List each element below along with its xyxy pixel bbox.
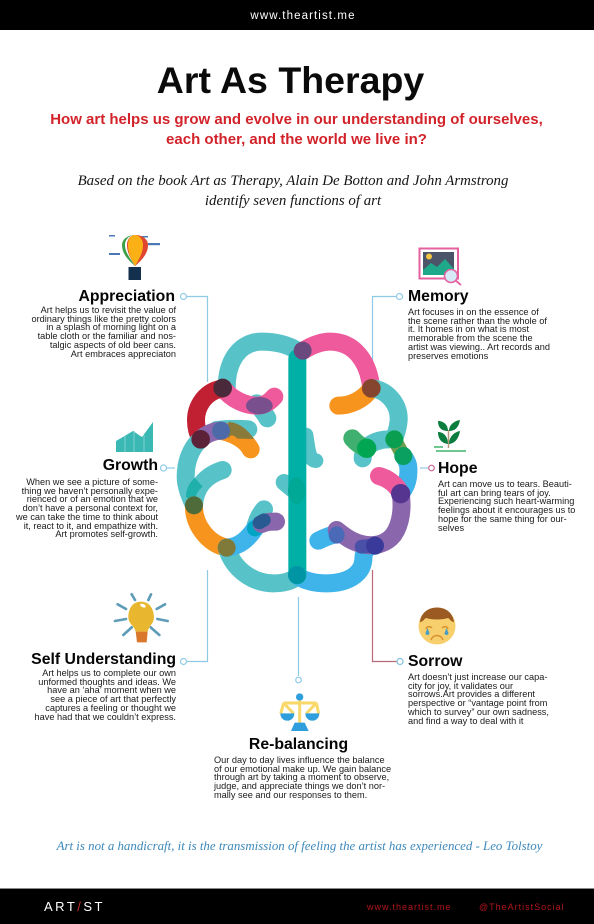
heading: Appreciation: Appreciation <box>78 288 175 305</box>
footer website: www.theartist.me <box>367 902 452 912</box>
intro text <box>78 173 508 208</box>
text: Self Understanding: captures a feeling or thought we <box>45 703 176 713</box>
text: Appreciation: Art helps us to revisit the value of <box>41 305 176 315</box>
text: Appreciation: table cloth or the familiar and nos- <box>38 331 176 341</box>
text: Hope: selves <box>438 523 464 533</box>
header bar: www.theartist.me <box>250 10 356 22</box>
text: Self Understanding <box>35 668 176 722</box>
text: Re-balancing: through art by taking a moment to observe, <box>214 772 389 782</box>
brain: central bar <box>288 342 312 584</box>
brain: right hemisphere <box>298 342 412 583</box>
icon: framed picture with magnifier <box>418 248 462 286</box>
icon: growth chart <box>116 422 153 452</box>
icon: hot air balloon <box>109 235 160 280</box>
text: Growth <box>16 477 158 539</box>
text: Memory <box>408 307 550 361</box>
text: Memory: preserves emotions <box>408 351 488 361</box>
text: Re-balancing: mally see and our responses to them. <box>214 790 367 800</box>
text: Memory: artist was viewing.. Art records and <box>408 342 550 352</box>
text: Sorrow: Art doesn’t just increase our capa- <box>408 672 547 682</box>
heading: Sorrow: Sorrow <box>408 653 462 670</box>
heading: Hope: Hope <box>438 460 478 477</box>
intro text: identify seven functions of art <box>205 192 381 208</box>
brain illustration <box>176 332 418 592</box>
title: Art As Therapy <box>157 59 424 101</box>
text: Appreciation: ordinary things like the pretty colors <box>31 314 176 324</box>
subtitle <box>50 111 543 148</box>
footer bar <box>0 888 594 924</box>
subtitle: How art helps us grow and evolve in our understanding of ourselves, <box>50 111 543 128</box>
text: Sorrow <box>408 672 549 726</box>
subtitle: each other, and the world we live in? <box>166 131 427 148</box>
text: Self Understanding: Art helps us to complete our own <box>42 668 176 678</box>
heading: Growth: Growth <box>103 457 158 474</box>
text: Sorrow: which to survey” our own sadness, <box>408 707 549 717</box>
text: Sorrow: city for joy, it validates our <box>408 681 513 691</box>
icon: balance scales <box>279 693 320 731</box>
text: Re-balancing: of our emotional make up. We gain balance <box>214 764 391 774</box>
text: Appreciation: talgic aspects of old beer cans. <box>50 340 176 350</box>
text: Appreciation: Art embraces appreciaton <box>71 349 176 359</box>
text: Re-balancing: Our day to day lives influence the balance <box>214 755 385 765</box>
text: Growth: it, react to it, and empathize with. <box>24 521 158 531</box>
text: Growth: Art promotes self-growth. <box>55 529 158 539</box>
text: Growth: rienced or of an emotion that we <box>27 494 158 504</box>
text: Self Understanding: have had that we couldn’t express. <box>35 712 176 722</box>
text: Hope: hope for the same thing for our- <box>438 514 567 524</box>
text: Growth: don’t have a personal context for, <box>23 503 158 513</box>
text: Growth: When we see a picture of some- <box>26 477 158 487</box>
text: Hope: feelings about it encourages us to <box>438 505 575 515</box>
heading: Self Understanding: Self Understanding <box>31 651 176 668</box>
heading: Memory: Memory <box>408 288 469 305</box>
text: Re-balancing: judge, and appreciate things we don’t nor- <box>214 781 385 791</box>
intro text: Based on the book Art as Therapy, Alain De Botton and John Armstrong <box>78 173 508 189</box>
text: Memory: Art focuses in on the essence of <box>408 307 539 317</box>
text: Appreciation: in a splash of morning light on a <box>46 322 176 332</box>
text: Growth: we can take the time to think about <box>16 512 158 522</box>
footer social handle: @TheArtistSocial <box>479 902 565 912</box>
text: Memory: it. It homes in on what is most <box>408 324 529 334</box>
icon: plant <box>434 420 466 452</box>
brain: left hemisphere <box>185 342 297 583</box>
header bar <box>0 0 594 30</box>
text: Hope: ful art can bring tears of joy. <box>438 488 551 498</box>
text: Hope: Experiencing such heart-warming <box>438 496 574 506</box>
text: Re-balancing <box>214 755 391 800</box>
text: Memory: the scene rather than the whole of <box>408 316 547 326</box>
text: Hope: Art can move us to tears. Beauti- <box>438 479 572 489</box>
text: Self Understanding: unformed thoughts and ideas. We <box>38 677 176 687</box>
text: Appreciation <box>31 305 176 359</box>
text: Hope <box>438 479 575 533</box>
icon: sad face <box>418 608 456 644</box>
text: Self Understanding: have an ‘aha’ moment when we <box>47 685 176 695</box>
heading: Re-balancing: Re-balancing <box>249 736 348 753</box>
text: Memory: memorable from the scene the <box>408 333 533 343</box>
text: Sorrow: perspective or “vantage point from <box>408 698 547 708</box>
text: Self Understanding: see a piece of art that perfectly <box>50 694 176 704</box>
text: Sorrow: and find a way to deal with it <box>408 716 523 726</box>
quote: Art is not a handicraft, it is the transmission of feeling the artist has experienced - Leo Tolstoy <box>57 839 542 853</box>
footer logo: ART/ST <box>44 899 105 914</box>
text: Sorrow: sorrows.Art provides a different <box>408 689 535 699</box>
icon: light bulb <box>114 592 169 642</box>
text: Growth: thing we haven’t personally expe- <box>22 486 158 496</box>
